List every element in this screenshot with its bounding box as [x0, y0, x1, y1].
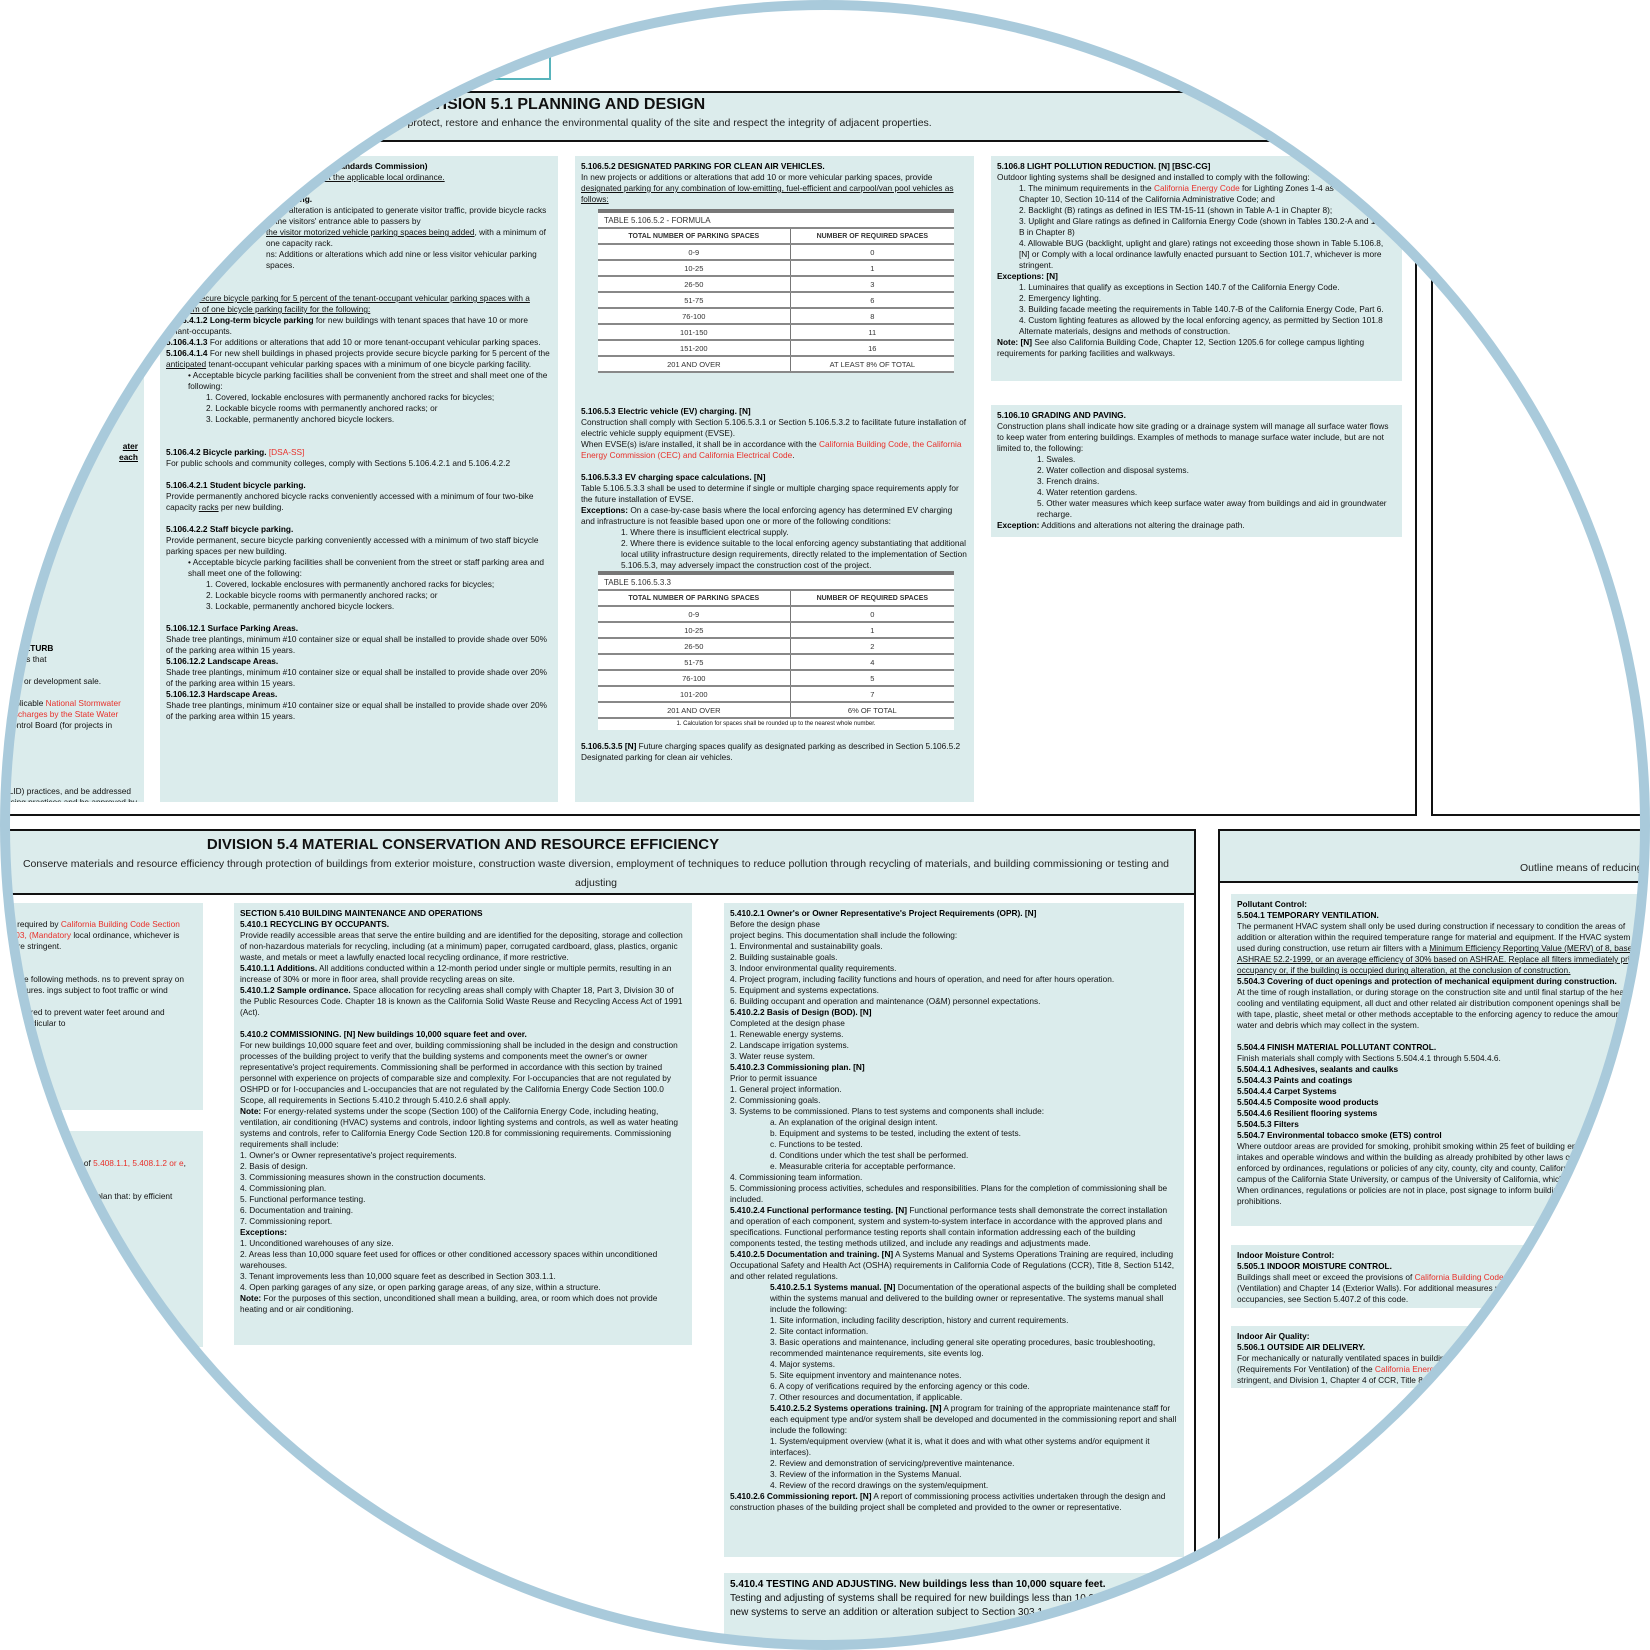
panel A	[0, 156, 144, 802]
table 5.106.5.2: 0	[870, 248, 874, 256]
panel 5.5 pollutant control: Where outdoor areas are provided for smoking, prohibit smoking within 25 feet of building entries, outdoor air intakes and operable windows and within the building as already prohibited by other laws or regulations; or as enforced by ordinances, regulations or policies of any city, county, city and county, California Community College, campus of the California State University, or campus of the University of California, whichever are more stringent. When ordinances, regulations or policies are not in place, post signage to inform building occupants of the prohibitions.	[1237, 1141, 1642, 1206]
panel D: 5.106.8 LIGHT POLLUTION REDUCTION. [N] [BSC-CG]	[997, 161, 1210, 171]
panel 5.4 right: Completed at the design phase	[730, 1018, 845, 1028]
panel D: 1. The minimum requirements in the California Energy Code for Lighting Zones 1-4 as defined in Chapter 10, Section 10-114 of the California Administrative Code; and	[1019, 183, 1372, 204]
panel B: • Acceptable bicycle parking facilities shall be convenient from the street and shall meet one of the following:	[188, 370, 547, 391]
table 5.106.5.3.3: 7	[870, 690, 874, 698]
panel 5.4 middle	[234, 903, 692, 1345]
panel 5.4 middle: 5.410.1 RECYCLING BY OCCUPANTS.	[240, 919, 389, 929]
panel 5.4 middle: 2. Areas less than 10,000 square feet used for offices or other conditioned accessory spaces within unconditioned warehouses.	[240, 1249, 657, 1270]
table 5.106.5.2: 101-150	[680, 328, 708, 336]
panel 5.4 middle: 7. Commissioning report.	[240, 1216, 332, 1226]
table 5.106.5.3.3: 26-50	[684, 642, 703, 650]
table 5.106.5.3.3: TOTAL NUMBER OF PARKING SPACES	[628, 594, 759, 602]
panel 5.4 right: 3. Systems to be commissioned. Plans to test systems and components shall include: 4. Commissioning team information.	[730, 1106, 1044, 1182]
panel 5.4 middle: Exceptions:	[240, 1227, 287, 1237]
panel 5.4 right: 5. Equipment and systems expectations.	[730, 985, 879, 995]
table 5.106.5.2: 76-100	[682, 312, 705, 320]
table 5.106.5.2: TABLE 5.106.5.2 - FORMULA	[604, 216, 711, 224]
panel 5.4 right: b. Equipment and systems to be tested, including the extent of tests.	[770, 1128, 1021, 1138]
panel E: 1. Swales.	[1037, 454, 1075, 464]
panel 5.4 right: Before the design phase	[730, 919, 820, 929]
panel 5.4 middle: For new buildings 10,000 square feet and over, building commissioning shall be included in the design and construction processes of the building project to verify that the building systems and components meet the owner's or owner representative's project requirements. Commissioning shall be performed in accordance with this section by trained personnel with experience on projects of comparable size and complexity. For I-occupancies that are not regulated by OSHPD or for I-occupancies and L-occupancies that are not regulated by the California Energy Code Section 100.0 Scope, all requirements in Sections 5.410.2 through 5.410.2.6 shall apply.	[240, 1040, 678, 1105]
table 5.106.5.2: 3	[870, 280, 874, 288]
panel B: California Building Standards Commission)	[256, 161, 427, 171]
panel 5.4 right: 6. Building occupant and operation and maintenance (O&M) personnel expectations.	[730, 996, 1040, 1006]
panel 5.4 right: 3. Water reuse system.	[730, 1051, 815, 1061]
panel 5.4 right: 5. Site equipment inventory and maintenance notes.	[770, 1370, 961, 1380]
panel E: Construction plans shall indicate how site grading or a drainage system will manage all surface water flows to keep water from entering buildings. Examples of methods to manage surface water include, but are not limited to, the following: Exception: Additions and alterations not altering the drainage path.	[997, 421, 1389, 530]
panel B: 3. Lockable, permanently anchored bicycle lockers.	[206, 601, 394, 611]
panel 5.4 middle: Provide readily accessible areas that serve the entire building and are identified for the depositing, storage and collection of non-hazardous materials for recycling, including (at a minimum) paper, corrugated cardboard, glass, plastics, organic waste, and metals or meet a lawfully enacted local recycling ordinance, if more restrictive.	[240, 930, 683, 962]
panel 5.4 right: 1. Site information, including facility description, history and current requirements.	[770, 1315, 1068, 1325]
panel D: Outdoor lighting systems shall be designed and installed to comply with the following: Exceptions: [N] Note: [N] See also California Building Code, Chapter 12, Section 1205.6 for college campus lighting requirements for parking facilities and walkways.	[997, 172, 1364, 358]
table 5.106.5.2: TOTAL NUMBER OF PARKING SPACES	[628, 232, 759, 240]
panel C: 5.106.5.2 DESIGNATED PARKING FOR CLEAN AIR VEHICLES.	[581, 161, 825, 171]
table 5.106.5.3.3: 10-25	[684, 626, 703, 634]
panel 5.4 left top: by the following methods. ns to prevent spray on structures. ings subject to foot traffic or wind	[8, 974, 184, 995]
panel 5.5 indoor moisture	[1231, 1245, 1650, 1308]
panel B: 5.106.4.1.4 For new shell buildings in phased projects provide secure bicycle parking for 5 percent of the anticipated tenant-occupant vehicular parking spaces with a minimum of one bicycle parking facility.	[166, 348, 550, 369]
panel 5.4 right: 5. Commissioning process activities, schedules and responsibilities. Plans for the completion of commissioning shall be included.	[730, 1183, 1167, 1204]
panel 5.4 middle: SECTION 5.410 BUILDING MAINTENANCE AND OPERATIONS	[240, 908, 482, 918]
panel B: 3. Lockable, permanently anchored bicycle lockers.	[206, 414, 394, 424]
panel C: Construction shall comply with Section 5.106.5.3.1 or Section 5.106.5.3.2 to facilitate future installation of electric vehicle supply equipment (EVSE).	[581, 417, 966, 438]
panel 5.5 pollutant control	[1231, 894, 1650, 1226]
panel 5.5 indoor moisture: Indoor Moisture Control:	[1237, 1250, 1334, 1260]
panel B: Shade tree plantings, minimum #10 container size or equal shall be installed to provide shade over 20% of the parking area within 15 years.	[166, 667, 547, 688]
panel B: 5.106.4.1.2 Long-term bicycle parking for new buildings with tenant spaces that have 10 or more tenant-occupants.	[166, 315, 528, 336]
panel B: 1. Covered, lockable enclosures with permanently anchored racks for bicycles;	[206, 579, 494, 589]
panel 5.5 indoor air quality: Indoor Air Quality:	[1237, 1331, 1310, 1341]
panel D: 3. Uplight and Glare ratings as defined in California Energy Code (shown in Tables 130.2-A and 130.2-B in Chapter 8)	[1019, 216, 1394, 237]
teal outline box	[0, 0, 551, 80]
division 5.1 header	[0, 91, 1650, 142]
panel 5.4 middle: 1. Owner's or Owner representative's project requirements.	[240, 1150, 457, 1160]
panel D: 2. Backlight (B) ratings as defined in IES TM-15-11 (shown in Table A-1 in Chapter 8);	[1019, 205, 1332, 215]
panel B: 5.106.4.2.1 Student bicycle parking.	[166, 480, 306, 490]
table 5.106.5.3.3: 76-100	[682, 674, 705, 682]
panel 5.4 right: 4. Major systems.	[770, 1359, 835, 1369]
panel B	[160, 156, 558, 802]
panel C: In new projects or additions or alterations that add 10 or more vehicular parking spaces, provide designated parking for any combination of low-emitting, fuel-efficient and carpool/van pool vehicles as follows:	[581, 172, 954, 204]
panel C: 5.106.5.3.3 EV charging space calculations. [N]	[581, 472, 765, 482]
panel B: 5.106.4.2 Bicycle parking. [DSA-SS]	[166, 447, 304, 457]
panel A: each	[119, 452, 138, 462]
panel 5.4 right: 6. A copy of verifications required by the enforcing agency or this code.	[770, 1381, 1030, 1391]
panel 5.4 right: 4. Review of the record drawings on the system/equipment.	[770, 1480, 988, 1490]
panel 5.4 middle: 5.410.1.2 Sample ordinance. Space allocation for recycling areas shall comply with Chapter 18, Part 3, Division 30 of the Public Resources Code. Chapter 18 is known as the California Solid Waste Reuse and Recycling Access Act of 1991 (Act).	[240, 985, 682, 1017]
panel A: applicable National Stormwater Discharges by the State Water Control Board (for projects in	[8, 698, 121, 730]
panel B: Provide permanently anchored bicycle racks conveniently accessed with a minimum of four two-bike capacity racks per new building.	[166, 491, 534, 512]
panel E: 2. Water collection and disposal systems.	[1037, 465, 1189, 475]
panel D: 4. Allowable BUG (backlight, uplight and glare) ratings not exceeding those shown in Table 5.106.8, [N] or Comply with a local ordinance lawfully enacted pursuant to Section 101.7, whichever is more stringent.	[1019, 238, 1383, 270]
panel B: 5.106.12.1 Surface Parking Areas.	[166, 623, 298, 633]
panel B: 5.106.12.3 Hardscape Areas.	[166, 689, 277, 699]
panel 5.4 right: d. Conditions under which the test shall be performed.	[770, 1150, 968, 1160]
table 5.106.5.3.3: 1	[870, 626, 874, 634]
panel A: ater	[123, 441, 138, 451]
panel B: For public schools and community colleges, comply with Sections 5.106.4.2.1 and 5.106.4.2.2	[166, 458, 510, 468]
horizontal divider	[0, 814, 1415, 816]
panel 5.5 pollutant control: 5.504.4.1 Adhesives, sealants and caulks	[1237, 1064, 1398, 1074]
table 5.106.5.2: 0-9	[688, 248, 699, 256]
panel B: ns: Additions or alterations which add nine or less visitor vehicular parking spaces.	[266, 249, 537, 270]
panel 5.5 indoor moisture: Buildings shall meet or exceed the provisions of California Building Code CCR, Title 24, Part 2, Sections 1203 (Ventilation) and Chapter 14 (Exterior Walls). For additional measures not applicable to low-rise residential occupancies, see Section 5.407.2 of this code.	[1237, 1272, 1639, 1304]
panel B: the visitor motorized vehicle parking spaces being added, with a minimum of one capacity rack.	[266, 227, 546, 248]
panel 5.4 right: c. Functions to be tested.	[770, 1139, 863, 1149]
panel 5.4 middle: 1. Unconditioned warehouses of any size.	[240, 1238, 394, 1248]
panel 5.4 right: 1. Renewable energy systems.	[730, 1029, 843, 1039]
panel 5.4 right: 5.410.2.5 Documentation and training. [N] A Systems Manual and Systems Operations Training are required, including Occupational Safety and Health Act (OSHA) requirements in California Code of Regulations (CCR), Title 8, Section 5142, and other related regulations. 5.410.2.6 Commissioning report. [N] A report of commissioning process activities undertaken through the design and construction phases of the building project shall be completed and provided to the owner or representative.	[730, 1249, 1174, 1512]
table 5.106.5.2: 16	[868, 344, 876, 352]
panel B: • Acceptable bicycle parking facilities shall be convenient from the street or staff parking area and shall meet one of the following:	[188, 557, 544, 578]
panel B: 5.106.4.1.2) or meet the applicable local ordinance.	[256, 172, 445, 182]
panel 5.4 middle: 5.410.1.1 Additions. All additions conducted within a 12-month period under single or multiple permits, resulting in an increase of 30% or more in floor area, shall provide recycling areas on site.	[240, 963, 671, 984]
panel 5.4 right: 3. Basic operations and maintenance, including general site operating procedures, basic troubleshooting, recommended maintenance requirements, site events log.	[770, 1337, 1155, 1358]
panel A: plan or development sale.	[8, 676, 101, 686]
table 5.106.5.3.3: NUMBER OF REQUIRED SPACES	[817, 594, 928, 602]
panel D: 1. Luminaires that qualify as exceptions in Section 140.7 of the California Energy Code.	[1019, 282, 1340, 292]
panel B: Provide secure bicycle parking for 5 percent of the tenant-occupant vehicular parking spaces with a minimum of one bicycle parking facility for the following:	[166, 293, 530, 314]
table 5.106.5.2: 10-25	[684, 264, 703, 272]
panel 5.4 right: 4. Project program, including facility functions and hours of operation, and need for after hours operation.	[730, 974, 1114, 984]
panel D: 3. Building facade meeting the requirements in Table 140.7-B of the California Energy Code, Part 6.	[1019, 304, 1384, 314]
panel D: 2. Emergency lighting.	[1019, 293, 1101, 303]
table 5.106.5.2: 51-75	[684, 296, 703, 304]
subtitle 5.4: adjusting	[575, 877, 617, 889]
panel 5.4 left bottom: e a minimum of 65% of 5.408.1.1, 5.408.1.2 or e, whichever is more	[8, 1158, 186, 1179]
panel 5.4 middle: 5. Functional performance testing.	[240, 1194, 365, 1204]
title 5.1: DIVISION 5.1 PLANNING AND DESIGN	[416, 96, 705, 113]
panel 5.4 right: 5.410.2.2 Basis of Design (BOD). [N]	[730, 1007, 872, 1017]
panel 5.5 indoor air quality: For mechanically or naturally ventilated spaces in buildings, meet the minimum requirements of Section 120.1 (Requirements For Ventilation) of the California Energy Code, or the applicable local code, whichever is more stringent, and Division 1, Chapter 4 of CCR, Title 8.	[1237, 1353, 1639, 1385]
panel C: Designated parking for clean air vehicles.	[581, 752, 733, 762]
title 5.4: DIVISION 5.4 MATERIAL CONSERVATION AND RESOURCE EFFICIENCY	[207, 836, 719, 853]
panel 5.5 indoor moisture: 5.505.1 INDOOR MOISTURE CONTROL.	[1237, 1261, 1392, 1271]
panel 5.4 middle: 4. Commissioning plan.	[240, 1183, 326, 1193]
panel 5.4 left top: as required by California Building Code Section 1503, (Mandatory local ordinance, whichever is more stringent.	[8, 919, 180, 951]
header 5.4	[0, 831, 1194, 895]
table 5.106.5.2: 11	[868, 328, 876, 336]
table 5.106.5.2: 8	[870, 312, 874, 320]
panel 5.4 middle: Note: For energy-related systems under the scope (Section 100) of the California Energy Code, including heating, ventilation, air conditioning (HVAC) systems and controls, indoor lighting systems and controls, as well as water heating systems and controls, refer to California Energy Code Section 120.8 for commissioning requirements. Commissioning requirements shall include:	[240, 1106, 678, 1149]
panel 5.5 pollutant control: 5.504.4.3 Paints and coatings	[1237, 1075, 1352, 1085]
table 5.106.5.3.3: 201 AND OVER	[667, 706, 720, 714]
panel B: 2. Lockable bicycle rooms with permanently anchored racks; or	[206, 403, 438, 413]
panel 5.4 right: 5.410.2.1 Owner's or Owner Representative's Project Requirements (OPR). [N]	[730, 908, 1036, 918]
panel C: When EVSE(s) is/are installed, it shall be in accordance with the California Building Code, the California Energy Commission (CEC) and California Electrical Code.	[581, 439, 961, 460]
panel 5.4 right: 7. Other resources and documentation, if applicable.	[770, 1392, 962, 1402]
panel 5.4 right: e. Measurable criteria for acceptable performance.	[770, 1161, 955, 1171]
panel C: 5.106.5.3.5 [N] Future charging spaces qualify as designated parking as described in Section 5.106.5.2	[581, 741, 960, 751]
panel 5.4 right: 5.410.2.5.1 Systems manual. [N] Documentation of the operational aspects of the building shall be completed within the systems manual and delivered to the building owner or representative. The systems manual shall include the following:	[770, 1282, 1176, 1314]
panel 5.5 pollutant control: 5.504.4.4 Carpet Systems	[1237, 1086, 1337, 1096]
panel 5.4 right: 2. Landscape irrigation systems.	[730, 1040, 849, 1050]
panel B: cle parking.	[266, 194, 312, 204]
division 5.5 box	[1218, 829, 1650, 1650]
table 5.106.5.2	[598, 209, 954, 373]
table 5.106.5.3.3: 1. Calculation for spaces shall be rounded up to the nearest whole number.	[676, 721, 876, 727]
table 5.106.5.3.3: TABLE 5.106.5.3.3	[604, 578, 671, 586]
panel C: Exceptions: On a case-by-case basis where the local enforcing agency has determined EV charging and infrastructure is not feasible based upon one or more of the following conditions:	[581, 505, 952, 526]
panel 5.4 middle: 6. Documentation and training.	[240, 1205, 353, 1215]
panel 5.4 middle: 3. Commissioning measures shown in the construction documents.	[240, 1172, 486, 1182]
panel 5.4 right: 5.410.2.5.2 Systems operations training. [N] A program for training of the appropriate maintenance staff for each equipment type and/or system shall be developed and documented in the commissioning report and shall include the following:	[770, 1403, 1176, 1435]
table 5.106.5.3.3: 101-200	[680, 690, 708, 698]
panel E: 5.106.10 GRADING AND PAVING.	[997, 410, 1126, 420]
panel 5.4 right: Prior to permit issuance	[730, 1073, 817, 1083]
panel 5.5 pollutant control: The permanent HVAC system shall only be used during construction if necessary to condition the areas of addition or alteration within the required temperature range for material and equipment. If the HVAC system is used during construction, use return air filters with a Minimum Efficiency Reporting Value (MERV) of 8, based on ASHRAE 52.2-1999, or an average efficiency of 30% based on ASHRAE. Replace all filters immediately prior to occupancy or, if the building is occupied during alteration, at the conclusion of construction.	[1237, 921, 1642, 975]
panel C	[575, 156, 974, 802]
panel E: 3. French drains.	[1037, 476, 1099, 486]
table 5.106.5.2: 1	[870, 264, 874, 272]
panel 5.5 indoor air quality	[1231, 1326, 1650, 1388]
panel 5.4 right: 5.410.2.4 Functional performance testing. [N] Functional performance tests shall demonstrate the correct installation and operation of each component, system and system-to-system interface in accordance with the approved plans and specifications. Functional performance testing reports shall contain information addressing each of the building components tested, the testing methods utilized, and include any readings and adjustments made.	[730, 1205, 1167, 1248]
panel E: 4. Water retention gardens.	[1037, 487, 1137, 497]
table 5.106.5.3.3: 2	[870, 642, 874, 650]
table 5.106.5.3.3: 6% OF TOTAL	[848, 706, 897, 714]
panel 5.5 pollutant control: Finish materials shall comply with Sections 5.504.4.1 through 5.504.4.6.	[1237, 1053, 1501, 1063]
panel 5.5 pollutant control: Pollutant Control:	[1237, 899, 1307, 909]
panel 5.4 left top	[0, 903, 203, 1110]
panel 5.4 left top: e covered to prevent water feet around and perpendicular to	[8, 1007, 165, 1028]
panel 5.4 right: 2. Site contact information.	[770, 1326, 868, 1336]
panel 5.4 right: 5.410.2.3 Commissioning plan. [N]	[730, 1062, 865, 1072]
panel B: Shade tree plantings, minimum #10 container size or equal shall be installed to provide shade over 50% of the parking area within 15 years.	[166, 634, 547, 655]
panel 5.4 right: 2. Review and demonstration of servicing/preventive maintenance.	[770, 1458, 1014, 1468]
panel 5.5 pollutant control: At the time of rough installation, or during storage on the construction site and until final startup of the heating, cooling and ventilating equipment, all duct and other related air distribution component openings shall be covered with tape, plastic, sheet metal or other methods acceptable to the enforcing agency to reduce the amount of dust, water and debris which may collect in the system.	[1237, 987, 1642, 1030]
panel B: Shade tree plantings, minimum #10 container size or equal shall be installed to provide shade over 20% of the parking area within 15 years.	[166, 700, 547, 721]
table 5.106.5.3.3: 4	[870, 658, 874, 666]
panel 5.4 right: 1. General project information.	[730, 1084, 842, 1094]
panel 5.5 pollutant control: 5.504.3 Covering of duct openings and protection of mechanical equipment during construction.	[1237, 976, 1617, 986]
panel 5.5 pollutant control: 5.504.7 Environmental tobacco smoke (ETS) control	[1237, 1130, 1442, 1140]
table 5.106.5.2: NUMBER OF REQUIRED SPACES	[817, 232, 928, 240]
panel 5.5 pollutant control: 5.504.5.3 Filters	[1237, 1119, 1299, 1129]
panel 5.4 right: 1. Environmental and sustainability goals.	[730, 941, 883, 951]
panel 5.4 bottom testing: 5.410.4 TESTING AND ADJUSTING. New buildings less than 10,000 square feet.	[730, 1579, 1105, 1590]
panel D: 4. Custom lighting features as allowed by the local enforcing agency, as permitted by Section 101.8 Alternate materials, designs and methods of construction.	[1019, 315, 1383, 336]
panel 5.4 right: 1. System/equipment overview (what it is, what it does and with what other systems and/or equipment it interfaces).	[770, 1436, 1150, 1457]
header 5.5	[1220, 831, 1650, 883]
panel 5.4 left bottom: d have a construction nt plan that: by efficient	[8, 1191, 172, 1201]
panel 5.4 right	[724, 903, 1184, 1557]
table 5.106.5.3.3: 0	[870, 610, 874, 618]
table 5.106.5.2: 151-200	[680, 344, 708, 352]
panel 5.4 middle: Note: For the purposes of this section, unconditioned shall mean a building, area, or room which does not provide heating and or air conditioning.	[240, 1293, 657, 1314]
panel 5.5 indoor air quality: 5.506.1 OUTSIDE AIR DELIVERY.	[1237, 1342, 1365, 1352]
table 5.106.5.3.3: 5	[870, 674, 874, 682]
subtitle 5.1: Plan the site selection, building design, building siting and development to protect, restore and enhance the environmental quality of the site and respect the integrity of adjacent properties.	[62, 117, 932, 129]
division 5.4 box	[0, 829, 1196, 1650]
panel B: 1. Covered, lockable enclosures with permanently anchored racks for bicycles;	[206, 392, 494, 402]
table 5.106.5.2: 26-50	[684, 280, 703, 288]
panel 5.5 pollutant control: 5.504.4 FINISH MATERIAL POLLUTANT CONTROL.	[1237, 1042, 1436, 1052]
header 5.5: Outline means of reducing	[1520, 862, 1642, 874]
panel B: 5.106.4.2.2 Staff bicycle parking.	[166, 524, 293, 534]
panel C: 5.106.5.3 Electric vehicle (EV) charging. [N]	[581, 406, 751, 416]
table 5.106.5.3.3	[598, 571, 954, 730]
panel 5.4 middle: 3. Tenant improvements less than 10,000 square feet as described in Section 303.1.1.	[240, 1271, 556, 1281]
panel 5.4 right: 2. Building sustainable goals.	[730, 952, 837, 962]
panel B: 2. Lockable bicycle rooms with permanently anchored racks; or	[206, 590, 438, 600]
table 5.106.5.3.3: 51-75	[684, 658, 703, 666]
panel B: Provide permanent, secure bicycle parking conveniently accessed with a minimum of two staff bicycle parking spaces per new building.	[166, 535, 538, 556]
panel C: 1. Where there is insufficient electrical supply.	[621, 527, 789, 537]
panel 5.5 pollutant control: 5.504.4.6 Resilient flooring systems	[1237, 1108, 1377, 1118]
panel 5.4 right: 3. Review of the information in the Systems Manual.	[770, 1469, 961, 1479]
panel B: ion or alteration is anticipated to generate visitor traffic, provide bicycle racks of the visitors' entrance able to passers by	[266, 205, 546, 226]
panel 5.5 pollutant control: 5.504.1 TEMPORARY VENTILATION.	[1237, 910, 1379, 920]
panel 5.4 middle: 4. Open parking garages of any size, or open parking garage areas, of any size, within a structure.	[240, 1282, 601, 1292]
right column lines	[1415, 263, 1433, 816]
panel 5.4 right: project begins. This documentation shall include the following:	[730, 930, 957, 940]
panel 5.5 pollutant control: 5.504.4.5 Composite wood products	[1237, 1097, 1379, 1107]
table 5.106.5.3.3: 0-9	[688, 610, 699, 618]
panel E: 5. Other water measures which keep surface water away from buildings and aid in groundwater recharge.	[1037, 498, 1387, 519]
panel 5.4 middle: 5.410.2 COMMISSIONING. [N] New buildings 10,000 square feet and over.	[240, 1029, 527, 1039]
subtitle 5.4	[23, 858, 1169, 889]
panel 5.4 middle: 2. Basis of design.	[240, 1161, 308, 1171]
panel 5.4 right: 3. Indoor environmental quality requirements.	[730, 963, 896, 973]
panel 5.4 right: a. An explanation of the original design intent.	[770, 1117, 937, 1127]
panel C: Table 5.106.5.3.3 shall be used to determine if single or multiple charging space requirements apply for the future installation of EVSE.	[581, 483, 959, 504]
subtitle 5.4: Conserve materials and resource efficiency through protection of buildings from exterior moisture, construction waste diversion, employment of techniques to reduce pollution through recycling of materials, and building commissioning or testing and	[23, 858, 1169, 870]
panel B: 5.106.12.2 Landscape Areas.	[166, 656, 278, 666]
panel C: 2. Where there is evidence suitable to the local enforcing agency substantiating that additional local utility infrastructure design requirements, directly related to the implementation of Section 5.106.5.3, may adversely impact the construction cost of the project.	[621, 538, 967, 570]
panel 5.4 bottom testing: Testing and adjusting of systems shall be required for new buildings less than 10,000 square feet or new systems to serve an addition or alteration subject to Section 303.1.	[730, 1593, 1170, 1618]
panel B: 5.106.4.1.3 For additions or alterations that add 10 or more tenant-occupant vehicular parking spaces.	[166, 337, 541, 347]
panel 5.4 right: 2. Commissioning goals.	[730, 1095, 820, 1105]
table 5.106.5.2: 6	[870, 296, 874, 304]
table 5.106.5.2: AT LEAST 8% OF TOTAL	[830, 360, 915, 368]
panel 5.4 bottom testing	[724, 1573, 1184, 1650]
panel 5.4 left bottom	[0, 1131, 203, 1347]
table 5.106.5.2: 201 AND OVER	[667, 360, 720, 368]
